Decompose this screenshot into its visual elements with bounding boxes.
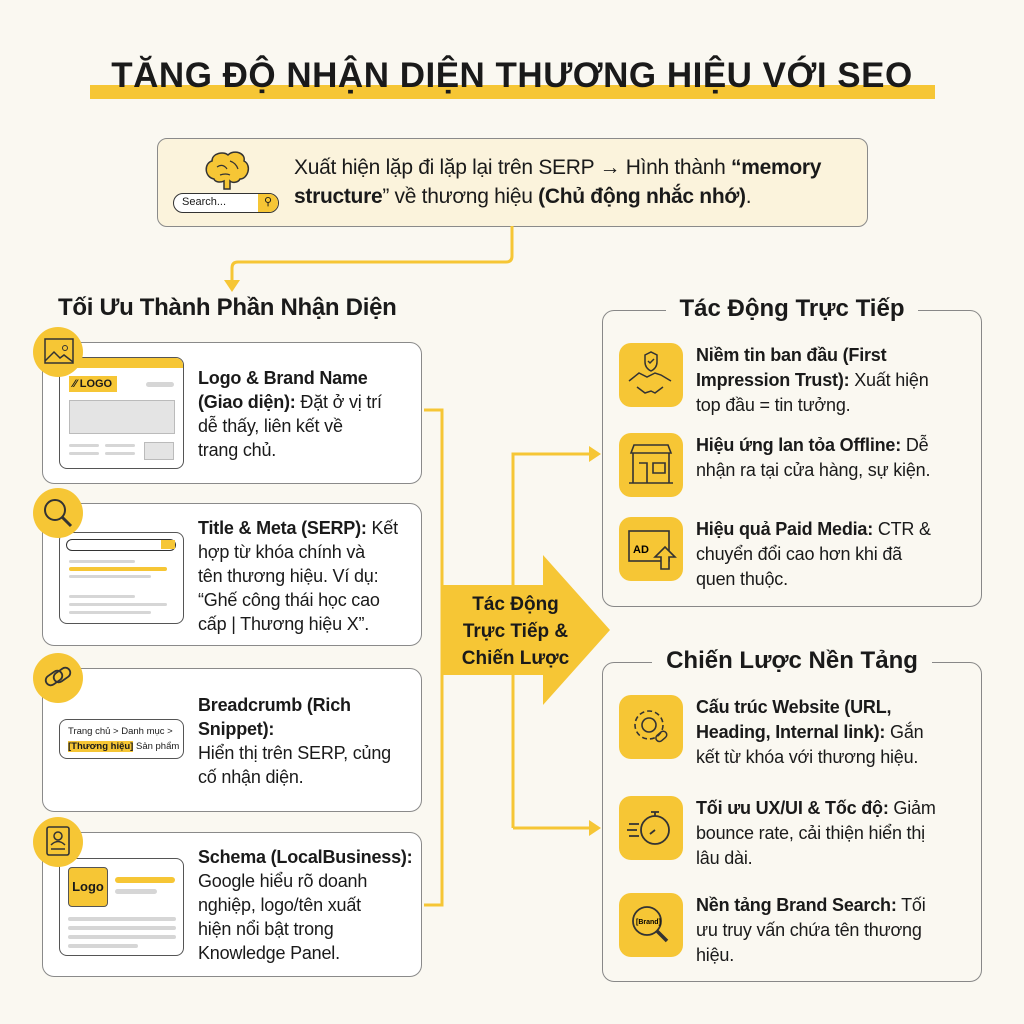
mockup: knowledge panel: Logo (72, 879, 104, 894)
item: structure: Cấu trúc Website (URL, (696, 697, 891, 717)
text (198, 368, 382, 460)
item: structure (619, 695, 923, 767)
heading: left: Tối Ưu Thành Phần Nhận Diện (58, 294, 396, 321)
intro box (157, 138, 868, 227)
text: Snippet): (198, 719, 274, 739)
text (198, 518, 398, 634)
text: Schema (LocalBusiness): (198, 847, 412, 867)
item: offline: nhận ra tại cửa hàng, sự kiện. (696, 460, 930, 480)
text: Title & Meta (SERP): Kết (198, 518, 398, 538)
text: hiện nổi bật trong (198, 919, 334, 939)
mockup: breadcrumb (59, 719, 184, 759)
text: Knowledge Panel. (198, 943, 340, 963)
item: paid media: AD (633, 544, 649, 556)
arrow: intro to left section (224, 226, 514, 292)
card: title meta (42, 503, 422, 646)
item: trust: top đầu = tin tưởng. (696, 395, 850, 415)
text: nghiệp, logo/tên xuất (198, 895, 361, 915)
item: offline (619, 433, 930, 497)
icon: brain (206, 151, 250, 190)
arrow: central big arrow: Trực Tiếp & (463, 621, 568, 642)
mockup: website (59, 357, 184, 469)
item: trust (619, 343, 928, 415)
text: Breadcrumb (Rich (198, 695, 351, 715)
item: offline: Hiệu ứng lan tỏa Offline: Dễ (696, 435, 928, 455)
item: paid media: quen thuộc. (696, 569, 788, 589)
icon: magnifier (33, 488, 83, 538)
item: ux speed: bounce rate, cải thiện hiển thị (696, 823, 925, 843)
text: hợp từ khóa chính và (198, 542, 365, 562)
item: paid media (619, 517, 931, 589)
item: brand search: Nền tảng Brand Search: Tối (696, 895, 926, 915)
text: Google hiểu rõ doanh (198, 871, 367, 891)
arrow: central big arrow: Tác Động (472, 594, 559, 615)
mockup: website: ⁄⁄ LOGO (73, 378, 112, 390)
card: logo (42, 342, 422, 484)
text (198, 847, 412, 963)
text (198, 695, 391, 787)
item: paid media: chuyển đổi cao hơn khi đã (696, 544, 902, 564)
item: structure: kết từ khóa với thương hiệu. (696, 747, 918, 767)
text: cố nhận diện. (198, 767, 304, 787)
text: tên thương hiệu. Ví dụ: (198, 566, 378, 586)
text: “Ghế công thái học cao (198, 590, 380, 610)
title: TĂNG ĐỘ NHẬN DIỆN THƯƠNG HIỆU VỚI SEO (111, 56, 913, 95)
text: Logo & Brand Name (198, 368, 368, 388)
intro text (294, 156, 822, 208)
item: trust: Impression Trust): Xuất hiện (696, 370, 928, 390)
intro text: Xuất hiện lặp đi lặp lại trên SERP → Hình thành “memory (294, 156, 821, 179)
item: ux speed (619, 796, 936, 868)
item: brand search: hiệu. (696, 945, 734, 965)
icon: link (33, 653, 83, 703)
text: dễ thấy, liên kết về (198, 416, 343, 436)
intro text: structure” về thương hiệu (Chủ động nhắc nhớ). (294, 185, 751, 208)
heading: Tác Động Trực Tiếp (680, 295, 904, 322)
mockup: serp (59, 532, 184, 624)
text: cấp | Thương hiệu X”. (198, 614, 369, 634)
item: brand search (619, 893, 926, 965)
item: trust: Niềm tin ban đầu (First (696, 345, 886, 365)
mockup: breadcrumb: Trang chủ > Danh mục > (68, 726, 173, 737)
search bar: ⚲ (264, 196, 272, 208)
mockup: knowledge panel (59, 858, 184, 956)
item: ux speed: lâu dài. (696, 848, 752, 868)
connector: branching arrows to right panels (512, 446, 601, 836)
item: brand search: ưu truy vấn chứa tên thương (696, 920, 922, 940)
search bar (173, 193, 279, 213)
panel: foundation strategy (602, 662, 982, 982)
card: breadcrumb (42, 668, 422, 812)
item: brand search: [Brand] (636, 919, 661, 926)
text: trang chủ. (198, 440, 276, 460)
text: (Giao diện): Đặt ở vị trí (198, 392, 382, 412)
arrow: central big arrow: Chiến Lược (462, 648, 569, 669)
text: Hiển thị trên SERP, củng (198, 743, 391, 763)
item: ux speed: Tối ưu UX/UI & Tốc độ: Giảm (696, 798, 936, 818)
item: structure: Heading, Internal link): Gắn (696, 722, 923, 742)
mockup: breadcrumb: [Thương hiệu] Sản phẩm (68, 741, 179, 752)
item: paid media: Hiệu quả Paid Media: CTR & (696, 519, 931, 539)
icon: profile card (33, 817, 83, 867)
connector: left cards to center (424, 408, 444, 906)
icon: image (33, 327, 83, 377)
heading: Chiến Lược Nền Tảng (666, 647, 918, 674)
card: schema (42, 832, 422, 977)
panel: direct impact (602, 310, 982, 607)
search bar: Search... (182, 196, 226, 208)
arrow: central big arrow (444, 555, 610, 705)
